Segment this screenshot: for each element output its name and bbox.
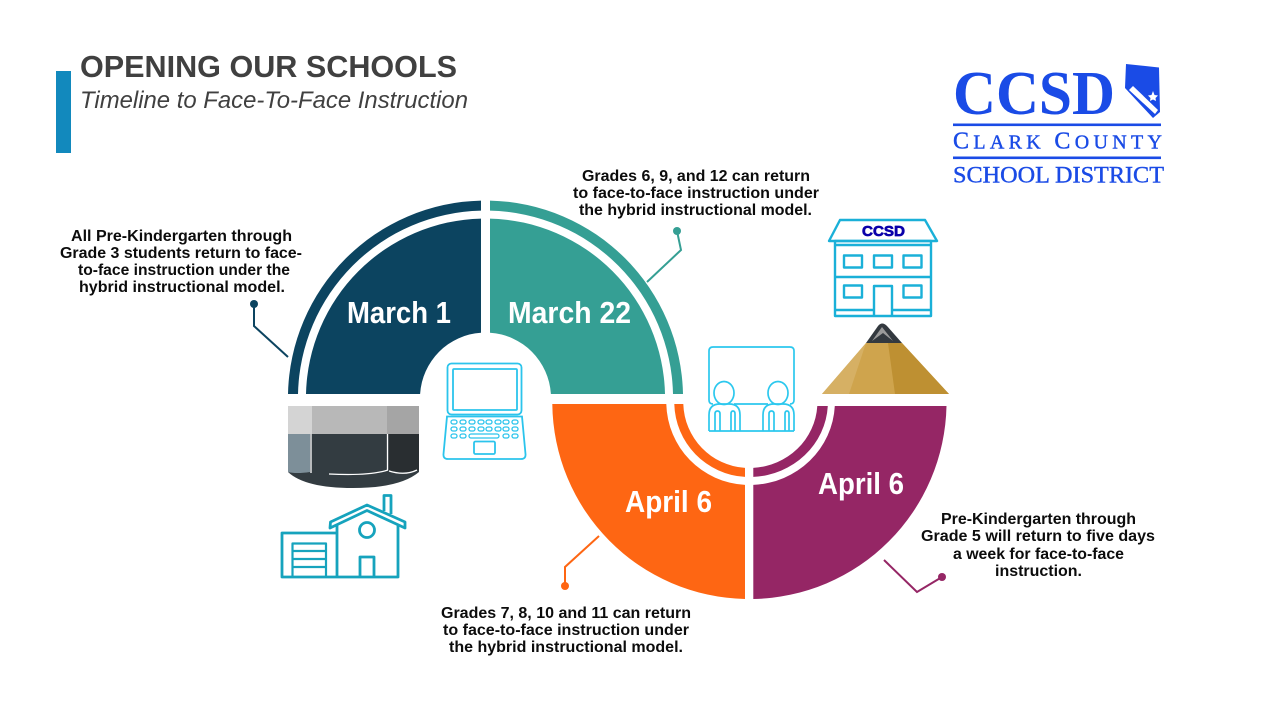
logo: School District: SCHOOL DISTRICT [953,162,1164,188]
connector: April 6 orange [561,536,599,590]
subtitle: Timeline to Face-To-Face Instruction [80,87,468,114]
icon: classroom with students and board [709,347,794,431]
callout: April 6 orange: the hybrid instructional model. [449,639,683,656]
panel: April 6 purple segment [753,406,946,599]
callout: March 22: the hybrid instructional model. [579,202,812,219]
icon: laptop [443,364,526,459]
date: March 22: March 22 [508,295,631,330]
callout: March 1: All Pre-Kindergarten through [71,228,292,245]
callout: April 6 purple [921,511,1155,580]
date: April 6 purple: April 6 [818,466,904,501]
callout: April 6 purple: Pre-Kindergarten through [941,511,1136,528]
callout: April 6 purple: a week for face-to-face [953,546,1124,563]
callout: April 6 orange: to face-to-face instruction under [443,622,689,639]
logo icon: Nevada state [1125,64,1160,118]
icon: school building [829,220,937,316]
logo wordmark: CCSD [953,60,1115,128]
callout: March 1: hybrid instructional model. [79,279,285,296]
logo: Clark County: CLARK COUNTY [953,128,1162,154]
date: April 6 orange: April 6 [625,484,712,519]
callout: March 1: Grade 3 students return to face- [60,245,302,262]
connector: March 22 [647,227,681,282]
callout: April 6 orange [441,605,691,656]
callout: March 22: to face-to-face instruction under [573,185,819,202]
panel: April 6 orange segment [552,404,745,599]
connector: March 1 [250,300,288,357]
callout: March 22: Grades 6, 9, and 12 can return [582,168,810,185]
connector: April 6 purple [884,560,946,592]
callout: April 6 orange: Grades 7, 8, 10 and 11 can return [441,605,691,622]
callout: March 1 [60,228,302,296]
callout: March 22 [573,168,819,219]
icon: pencil tip [822,324,949,394]
panel: March 1 segment [288,201,481,394]
date: March 1: March 1 [347,295,451,330]
accent bar [56,71,71,153]
icon: cylinder block [288,406,419,488]
label: CCSD on school: CCSD [862,223,905,240]
icon: house with garage [282,496,405,577]
logo: CCSD [953,60,1164,188]
callout: April 6 purple: instruction. [995,563,1082,580]
callout: April 6 purple: Grade 5 will return to five days [921,528,1155,545]
callout: March 1: to-face instruction under the [78,262,290,279]
panel: March 22 segment [490,201,683,394]
title: OPENING OUR SCHOOLS [80,49,457,84]
